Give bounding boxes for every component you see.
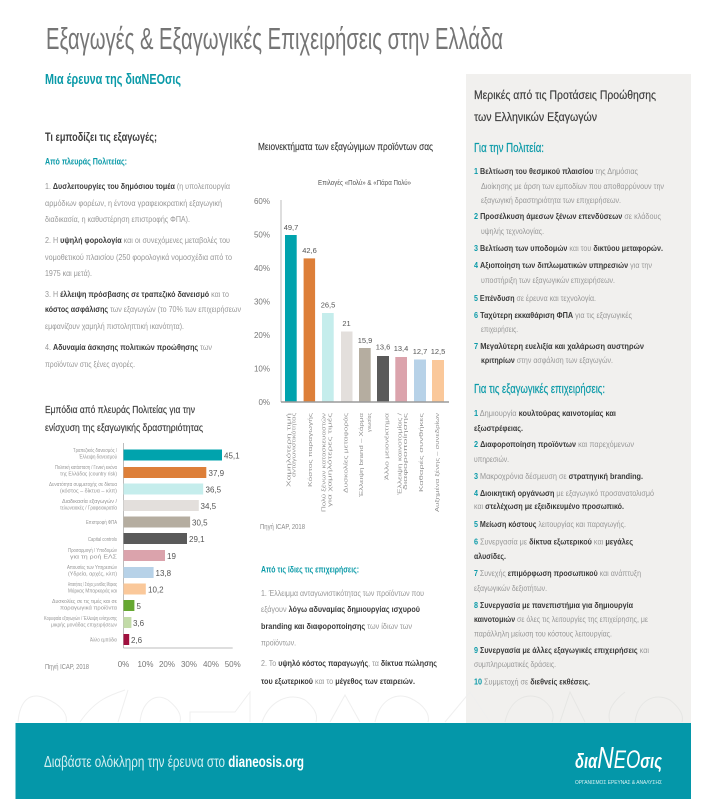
- text block: business obstacles: προϊόντων.: [261, 638, 296, 648]
- column chart: disadvantages: Δυσκολίες μεταφοράς: [342, 413, 350, 493]
- heading: proposals: Μερικές από τις Προτάσεις Προώθησης: [474, 88, 656, 102]
- column chart: disadvantages: Καθαρές συνθήκες: [418, 413, 425, 492]
- column chart: disadvantages: διαφοροποίησης: [403, 413, 409, 490]
- bar chart: barriers: Άλλο εμπόδιο: [90, 636, 117, 644]
- list: proposals for businesses: 1 Δημιουργία κουλτούρας καινοτομίας και: [474, 408, 617, 418]
- text block: business obstacles: 2. Το υψηλό κόστος παραγωγής, τα δίκτυα πώλησης: [261, 658, 437, 668]
- list: proposals for the state: 4 Αξιοποίηση των διπλωματικών υπηρεσιών για την: [474, 260, 652, 270]
- column chart: disadvantages: ανταγωνιστικότητας: [290, 413, 298, 477]
- bar chart: barriers: (Υδρεία, αρχές, κλπ): [68, 570, 117, 578]
- source note: Πηγή ICAP, 2018: [260, 522, 305, 531]
- bar chart: barriers: 3,6: [133, 619, 145, 628]
- column chart: disadvantages: 0%: [258, 398, 270, 407]
- text block: state obstacles: αρμόδιων φορέων, η έντονα γραφειοκρατική εξαγωγική: [45, 198, 222, 208]
- column chart: disadvantages: 30%: [254, 298, 270, 306]
- column chart: disadvantages: 12,7: [413, 347, 427, 356]
- bar chart: barriers: 13,8: [156, 569, 172, 578]
- list: proposals for the state: 3 Βελτίωση των υποδομών και του δικτύου μεταφορών.: [474, 243, 663, 253]
- column chart: disadvantages: 42,6: [302, 246, 317, 255]
- text block: business obstacles: branding και διαφοροποίησης των ίδιων των: [261, 621, 412, 631]
- heading: proposals: [474, 88, 656, 124]
- list: proposals for businesses: 6 Συνεργασία με δίκτυα εξωτερικού και μεγάλες: [474, 536, 633, 546]
- heading: product disadvantages: Μειονεκτήματα των εξαγώγιμων προϊόντων σας: [258, 141, 433, 153]
- column chart: disadvantages: 50%: [254, 230, 270, 240]
- text block: state obstacles: εμφανίζουν χαμηλή πιστοληπτική ικανότητα).: [45, 321, 184, 331]
- bar chart: barriers: 30%: [181, 660, 197, 669]
- column chart: disadvantages: [254, 197, 449, 512]
- list: proposals for the state: υψηλής τεχνολογίας.: [481, 226, 544, 236]
- column chart: disadvantages: Έλλειψη καινοτομίας /: [398, 412, 404, 496]
- bar chart: barriers: 40%: [203, 660, 219, 669]
- bar chart: barriers: 29,1: [189, 535, 205, 544]
- footer call to action: Διαβάστε ολόκληρη την έρευνα στο dianeosis.org: [44, 754, 304, 771]
- list: proposals for the state: εξαγωγική δραστηριότητα των επιχειρήσεων.: [481, 195, 621, 205]
- text block: business obstacles: [261, 588, 437, 686]
- bar chart: barriers: παραγωγικά προϊόντα: [60, 604, 118, 612]
- logo: diaNEOsis: διαΝΕΟσις: [575, 740, 662, 775]
- subheading: for the state: Για την Πολιτεία:: [474, 141, 544, 155]
- text block: business obstacles: εξάγουν λόγω αδυναμίας δημιουργίας ισχυρού: [261, 604, 420, 614]
- list: proposals for businesses: 3 Μακροχρόνια δέσμευση σε στρατηγική branding.: [474, 471, 643, 481]
- bar chart: barriers: 10,2: [148, 586, 164, 594]
- bar chart: barriers: 2,6: [131, 636, 143, 645]
- column chart: disadvantages: 13,6: [376, 342, 390, 352]
- list: proposals for the state: 5 Επένδυση σε έρευνα και τεχνολογία.: [474, 293, 596, 303]
- bar chart: barriers: τελωνειακές / Γραφειοκρατία: [60, 504, 118, 512]
- logo: diaNEOsis: ΟΡΓΑΝΙΣΜΟΣ ΕΡΕΥΝΑΣ & ΑΝΑΛΥΣΗΣ: [575, 780, 662, 786]
- bar chart: barriers: Διαδικασία εξαγωγών /: [62, 499, 117, 505]
- text block: state obstacles: 3. Η έλλειψη πρόσβασης σε τραπεζικό δανεισμό και το: [45, 289, 229, 299]
- list: proposals for businesses: 7 Συνεχής επιμόρφωση προσωπικού και ανάπτυξη: [474, 568, 641, 578]
- column chart: disadvantages: 21: [342, 319, 351, 328]
- column chart: disadvantages: 60%: [254, 197, 270, 206]
- column chart: disadvantages: 12,5: [431, 347, 445, 356]
- bar chart: barriers: Απαιτήσεις / Στόχος μονάδας Μάρκας: [68, 581, 117, 588]
- text block: state obstacles: 4. Αδυναμία άσκησης πολιτικών προώθησης των: [45, 342, 212, 352]
- panel: background of proposals: [466, 74, 691, 724]
- panel: barriers chart: [44, 404, 241, 671]
- column chart: disadvantages: Άλλο μειονέκτημα: [384, 412, 390, 480]
- bar chart: barriers: Πολιτική κατάσταση / Γενική εικόνα: [55, 464, 118, 471]
- list: proposals for businesses: 8 Συνεργασία με πανεπιστήμια για δημιουργία: [474, 600, 634, 610]
- list: proposals for the state: 7 Μεγαλύτερη ευελιξία και χαλάρωση αυστηρών: [474, 341, 644, 351]
- bar chart: barriers: Απουσίες των Υπηρεσιών: [67, 565, 117, 571]
- list: proposals for businesses: και στελέχωση με εξειδικευμένο προσωπικό.: [474, 501, 624, 511]
- heading: barriers chart: Εμπόδια από πλευράς Πολιτείας για την: [45, 404, 195, 416]
- bar chart: barriers: 30,5: [192, 518, 208, 528]
- list: proposals for businesses: 9 Συνεργασία με άλλες εξαγωγικές επιχειρήσεις και: [474, 645, 649, 655]
- list: proposals for the state: κριτηρίων στην ασφάλιση των εξαγωγών.: [481, 355, 613, 365]
- list: proposals for businesses: αλυσίδες.: [474, 551, 506, 561]
- bar chart: barriers: Κορυφαία εξαγωγών / Έλλειψη ενίσχυσης: [44, 616, 117, 622]
- text block: state obstacles: [45, 181, 241, 369]
- footer banner: [16, 723, 691, 799]
- bar chart: barriers: 5: [136, 602, 142, 611]
- column chart: disadvantages: 40%: [254, 264, 270, 273]
- chart subtitle: Επιλογές «Πολύ» & «Πάρα Πολύ»: [318, 178, 411, 187]
- heading: barriers chart: ενίσχυση της εξαγωγικής δραστηριότητας: [45, 422, 203, 434]
- bar chart: barriers: Μάρκας Μπαρκοράς και: [68, 588, 118, 594]
- column chart: disadvantages: γνωσίας: [367, 413, 373, 432]
- list: proposals for businesses: συμπληρωματικές δράσεις.: [474, 659, 556, 669]
- heading: barriers chart: [45, 404, 203, 434]
- bar chart: barriers: Δυνατότητα συμμετοχής σε δίκτυα: [49, 481, 118, 488]
- text block: state obstacles: 1. Δυσλειτουργίες του δημόσιου τομέα (η υπολειτουργία: [45, 181, 230, 191]
- list: proposals for the state: 6 Ταχύτερη εκκαθάριση ΦΠΑ για τις εξαγωγικές: [474, 310, 632, 320]
- text block: business obstacles: του εξωτερικού και το μέγεθος των εταιρειών.: [261, 676, 415, 686]
- list: proposals for the state: υποστήριξη των εξαγωγικών επιχειρήσεων.: [481, 275, 615, 285]
- panel: proposals for promoting Greek exports: [474, 88, 664, 686]
- list: proposals for businesses: 10 Συμμετοχή σε διεθνείς εκθέσεις.: [474, 676, 590, 686]
- panel: from the businesses themselves: [261, 564, 437, 686]
- source note: Πηγή ICAP, 2018: [45, 662, 89, 671]
- subtitle: Μια έρευνα της διαΝΕΟσις: [45, 72, 181, 88]
- bar chart: barriers: 50%: [225, 660, 241, 669]
- bar chart: barriers: μικρής μονάδας επιχειρήσεων: [51, 622, 117, 628]
- list: proposals for businesses: 5 Μείωση κόστους λειτουργίας και παραγωγής.: [474, 519, 626, 529]
- panel: what hinders exports: [45, 130, 241, 369]
- column chart: disadvantages: 15,9: [358, 336, 372, 345]
- bar chart: barriers: 36,5: [206, 486, 222, 494]
- text block: state obstacles: νομοθετικού πλαισίου (250 φορολογικά νομοσχέδια από το: [45, 252, 232, 262]
- bar chart: barriers: Capital controls: [88, 537, 117, 543]
- list: proposals for businesses: εξωστρέφειας.: [474, 423, 523, 433]
- list: proposals for businesses: καινοτομιών σε όλες τις λειτουργίες της επιχείρησης, με: [474, 614, 648, 624]
- column chart: disadvantages: 10%: [254, 364, 270, 374]
- text block: state obstacles: κόστος ασφάλισης των εξαγωγών (το 70% των επιχειρήσεων: [45, 304, 241, 314]
- list: proposals for businesses: εξαγωγικών δεξιοτήτων.: [474, 583, 547, 593]
- bar chart: barriers: 45,1: [224, 452, 240, 460]
- bar chart: barriers: της Ελλάδας (country risk): [60, 470, 117, 478]
- text block: state obstacles: προϊόντων στις ξένες αγορές.: [45, 359, 135, 369]
- list: proposals for businesses: [474, 408, 654, 686]
- list: proposals for businesses: υπηρεσιών.: [474, 454, 509, 464]
- text block: state obstacles: διαδικασία, η καθυστέρηση επιστροφής ΦΠΑ).: [45, 214, 190, 224]
- bar chart: barriers: για τη ροή ΕΛΣ: [70, 554, 118, 560]
- bar chart: barriers: 34,5: [200, 502, 217, 511]
- list: proposals for businesses: 4 Διοικητική οργάνωση με εξαγωγικό προσανατολισμό: [474, 488, 654, 498]
- heading: what hinders exports: Τι εμποδίζει τις εξαγωγές;: [45, 130, 157, 144]
- bar chart: barriers: 37,9: [208, 469, 225, 478]
- column chart: disadvantages: Κόστος παραγωγής: [307, 413, 314, 487]
- bar chart: barriers: Έλλειψη δανεισμού: [78, 454, 117, 460]
- column chart: disadvantages: 49,7: [284, 223, 298, 232]
- bar chart: barriers: Τραπεζικός δανεισμός /: [73, 447, 117, 454]
- column chart: disadvantages: 26,5: [321, 300, 335, 310]
- list: proposals for the state: 2 Προσέλκυση άμεσων ξένων επενδύσεων σε κλάδους: [474, 211, 661, 221]
- bar chart: barriers: Δυσκολίες σε τις τιμές και σε: [52, 598, 117, 605]
- bar chart: barriers: 19: [167, 552, 176, 561]
- list: proposals for the state: Διοίκησης με άρση των εμποδίων που αποθαρρύνουν την: [481, 181, 664, 191]
- heading: proposals: των Ελληνικών Εξαγωγών: [474, 110, 597, 124]
- text block: state obstacles: 2. Η υψηλή φορολογία και οι συνεχόμενες μεταβολές του: [45, 235, 230, 245]
- column chart: disadvantages: Αυξημένα ξένης – συνεδρίων: [434, 413, 441, 512]
- panel: product disadvantages chart: [254, 141, 449, 531]
- bar chart: barriers: (κόστος – δίκτυα – κλπ): [60, 488, 117, 494]
- list: proposals for businesses: παράλληλη μείωση του κόστους λειτουργίας.: [474, 628, 612, 638]
- text block: business obstacles: 1. Έλλειμμα ανταγωνιστικότητας των προϊόντων που: [261, 588, 424, 598]
- bar chart: barriers: 0%: [118, 660, 129, 669]
- column chart: disadvantages: 20%: [254, 331, 270, 340]
- list: proposals for businesses: 2 Διαφοροποίηση προϊόντων και παρεχόμενων: [474, 439, 634, 449]
- column chart: disadvantages: Έλλειψη brand – Χάρμα: [358, 412, 365, 498]
- bar chart: barriers: Επιστροφή ΦΠΑ: [86, 519, 117, 526]
- column chart: disadvantages: Πολύ ξένων κατασκευαστών: [320, 413, 328, 512]
- bar chart: barriers: 20%: [159, 660, 175, 669]
- bar chart: barriers: 10%: [137, 660, 154, 669]
- text block: state obstacles: 1975 και μετά).: [45, 268, 92, 278]
- list: proposals for the state: επιχειρήσεις.: [481, 324, 518, 334]
- column chart: disadvantages: 13,4: [394, 344, 408, 353]
- bar chart: barriers: [44, 443, 241, 669]
- column chart: disadvantages: Χαμηλότερη τιμή: [286, 413, 292, 487]
- column chart: disadvantages: για χαμηλότερες τιμές: [326, 413, 334, 507]
- bar chart: barriers: Προσαρμογή / Υποδομών: [68, 547, 117, 554]
- subheading: from the state: Από πλευράς Πολιτείας:: [45, 156, 127, 168]
- list: proposals for the state: [474, 166, 664, 365]
- subheading: from businesses: Από τις ίδιες τις επιχειρήσεις:: [261, 564, 359, 576]
- list: proposals for the state: 1 Βελτίωση του θεσμικού πλαισίου της Δημόσιας: [474, 166, 638, 176]
- subheading: for exporting businesses: Για τις εξαγωγικές επιχειρήσεις:: [474, 382, 605, 396]
